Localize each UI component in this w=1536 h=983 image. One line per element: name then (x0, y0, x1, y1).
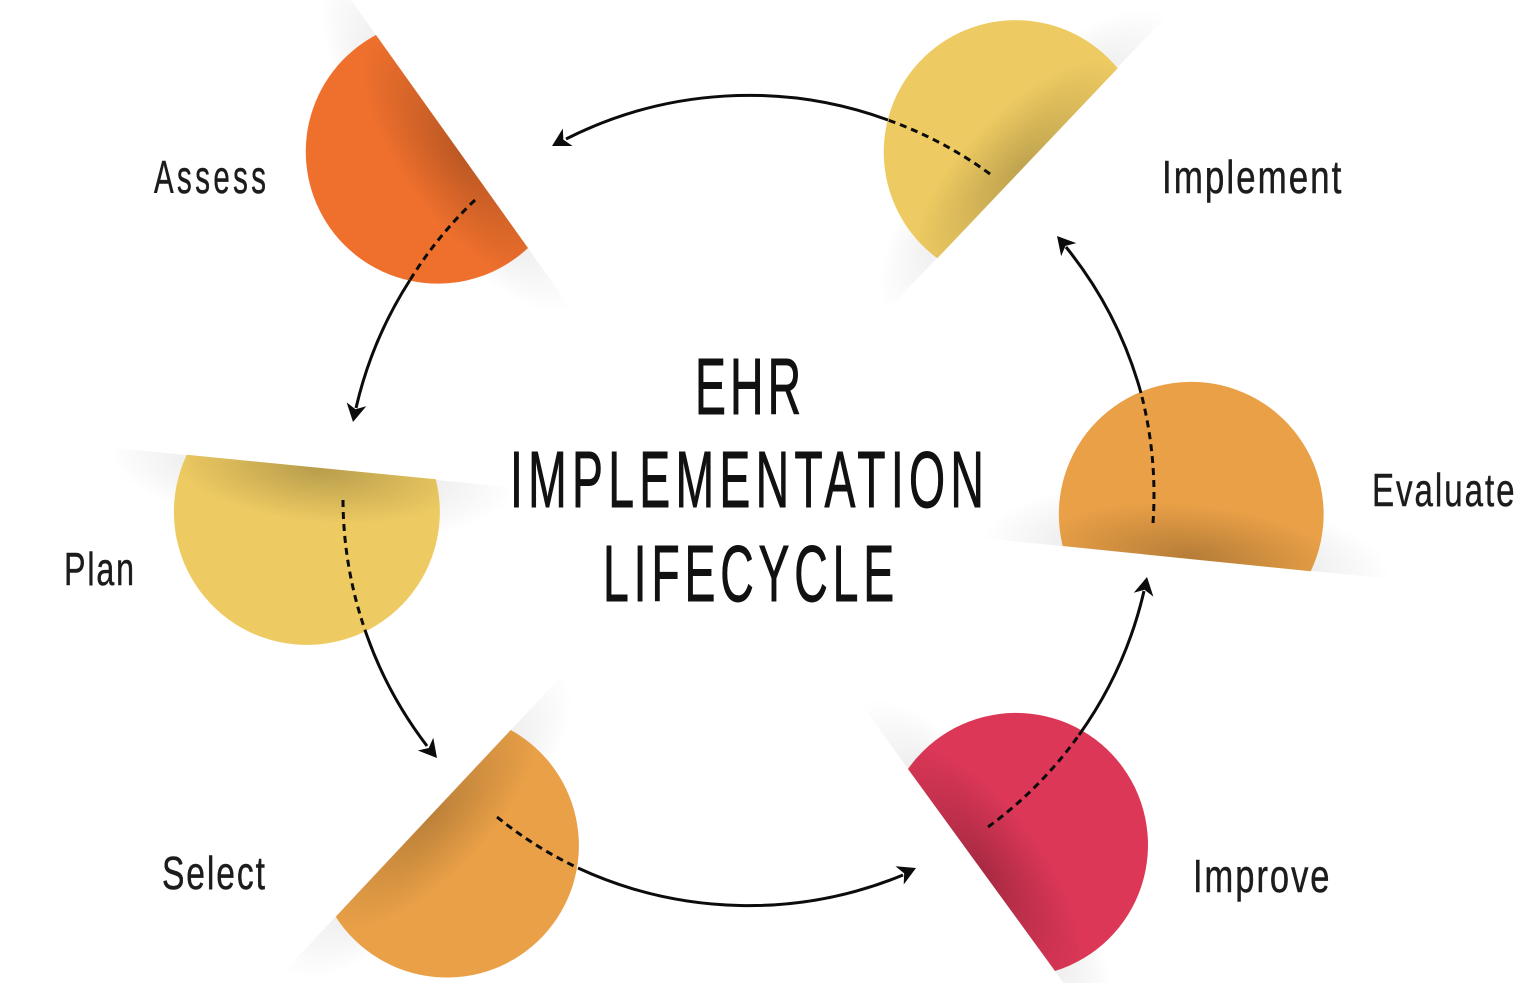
title: EHR Implementation Lifecycle (510, 342, 984, 618)
label: Select: Select (162, 848, 265, 899)
arrow: Assess to Plan (343, 200, 475, 424)
segment: Plan semicircle (101, 447, 515, 645)
arrow: Plan to Select (343, 500, 445, 764)
segment: Implement semicircle (835, 0, 1168, 312)
label: Improve: Improve (1193, 850, 1330, 902)
label: Assess: Assess (154, 153, 266, 204)
segment: Select semicircle (283, 674, 615, 983)
label: Evaluate: Evaluate (1372, 466, 1515, 516)
title: EHR Implementation Lifecycle: IMPLEMENTATION (510, 435, 984, 524)
segment: Evaluate semicircle (983, 382, 1397, 579)
segment: Improve semicircle (861, 663, 1150, 983)
arrow: Improve to Evaluate (988, 575, 1157, 827)
label: Plan: Plan (64, 544, 134, 595)
label: Implement: Implement (1162, 151, 1342, 203)
title: EHR Implementation Lifecycle: LIFECYCLE (603, 529, 894, 618)
arrow: Implement to Assess (547, 95, 990, 174)
segment: Assess semicircle (276, 0, 571, 349)
arrow: Evaluate to Implement (1049, 229, 1154, 523)
arrow: Select to Improve (497, 817, 920, 906)
title: EHR Implementation Lifecycle: EHR (695, 342, 801, 431)
